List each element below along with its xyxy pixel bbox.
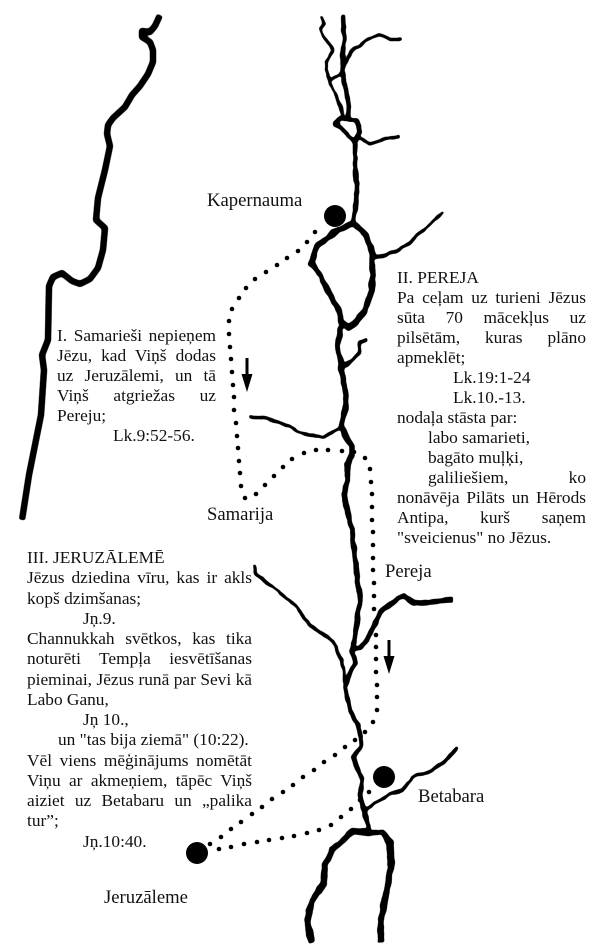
Sea of Galilee — [311, 223, 373, 328]
text block: II. Pereja: "sveicienus" no Jēzus. — [397, 528, 551, 547]
arrow: down toward Samaria — [242, 358, 252, 392]
text block: III. Jeruzālemē: un "tas bija ziemā" (10:22). — [58, 730, 249, 749]
arrow: down through Perea — [384, 640, 394, 674]
text block: I. Samaria: Jēzu, kad Viņš dodas — [57, 346, 216, 365]
Dead Sea — [307, 831, 391, 943]
text block: II. Pereja: II. PEREJA — [397, 268, 479, 287]
small lake interior — [340, 121, 354, 136]
text block: III. Jeruzālemē: tur”; — [27, 811, 59, 830]
label: Samarija: Samarija — [207, 504, 273, 525]
text block: II. Pereja: apmeklēt; — [397, 348, 465, 367]
city marker: Betabara — [373, 766, 395, 788]
route dots — [208, 230, 379, 851]
text block: II. Pereja: galiliešiem, ko — [428, 468, 586, 487]
river between lakes — [353, 143, 357, 222]
label: Jeruzāleme: Jeruzāleme — [104, 887, 188, 908]
text block: I. Samaria: I. Samarieši nepieņem — [57, 326, 216, 345]
text block: II. Pereja: pilsētām, kuras plāno — [397, 328, 586, 347]
text block: III. Jeruzālemē: pieminai, Jēzus runā par Sevi kā — [27, 670, 252, 688]
text block: III. Jeruzālemē: Jņ.10:40. — [83, 832, 147, 850]
small lake outline — [335, 118, 359, 143]
city marker: Jeruzāleme — [186, 842, 208, 864]
label: Pereja: Pereja — [385, 561, 432, 582]
label: Betabara: Betabara — [418, 786, 484, 807]
text block: I. Samaria: uz Jeruzālemi, un tā — [57, 366, 216, 385]
tributary near Pella — [343, 339, 367, 367]
text block: II. Pereja: Pa ceļam uz turieni Jēzus — [397, 288, 586, 307]
text block: III. Jeruzālemē: Vēl viens mēģinājums nomētāt — [27, 750, 252, 770]
text block: II. Pereja: nonāvēja Pilāts un Hērods — [397, 488, 586, 507]
text block: II. Pereja: sūta 70 mācekļus uz — [397, 308, 586, 327]
coastline — [22, 15, 160, 520]
text block: II. Pereja: nodaļa stāsta par: — [397, 408, 517, 427]
text block: II. Pereja: labo samarieti, — [428, 428, 530, 447]
Jordan river middle — [338, 326, 360, 650]
label: Kapernauma: Kapernauma — [207, 190, 302, 211]
text block: II. Pereja — [397, 268, 586, 547]
Jabbok tributary — [345, 596, 453, 685]
text block: I. Samaria: Lk.9:52-56. — [113, 426, 195, 445]
text block: III. Jeruzālemē: kopš dzimšanas; — [27, 588, 141, 608]
text block: III. Jeruzālemē: Jņ.9. — [83, 609, 116, 628]
text block: III. Jeruzālemē — [27, 548, 252, 850]
east tributary — [372, 212, 444, 258]
upper rivers — [320, 15, 402, 118]
river system — [249, 15, 458, 943]
text block: III. Jeruzālemē: Labo Ganu, — [27, 690, 109, 709]
text block: II. Pereja: Lk.10.-13. — [453, 388, 526, 407]
Samaria tributary — [249, 416, 341, 437]
text block: III. Jeruzālemē: Viņu ar akmeņiem, tāpēc Viņš — [27, 771, 252, 790]
city marker: Kapernauma — [324, 205, 346, 227]
Betabara tributary — [365, 748, 458, 811]
text block: II. Pereja: Antipa, kurš saņem — [397, 508, 586, 527]
text block: I. Samaria: Pereju; — [57, 406, 106, 425]
Jordan river lower — [345, 685, 369, 832]
text block: III. Jeruzālemē: Jēzus dziedina vīru, kas ir akls — [27, 568, 252, 587]
text block: III. Jeruzālemē: Jņ 10., — [83, 710, 129, 729]
text block: II. Pereja: bagāto muļķi, — [428, 448, 523, 467]
west tributary — [254, 564, 345, 685]
text block: II. Pereja: Lk.19:1-24 — [453, 368, 530, 387]
north-east tributary — [358, 136, 400, 144]
text block: III. Jeruzālemē: aiziet uz Betabaru un „palika — [27, 791, 252, 810]
text block: III. Jeruzālemē: III. JERUZĀLEMĒ — [27, 548, 165, 567]
text block: I. Samaria — [57, 326, 216, 445]
text block: I. Samaria: Viņš atgriežas uz — [57, 386, 216, 405]
text block: III. Jeruzālemē: Channukkah svētkos, kas tika — [27, 629, 252, 648]
text block: III. Jeruzālemē: noturēti Tempļa iesvētīšanas — [27, 649, 252, 668]
